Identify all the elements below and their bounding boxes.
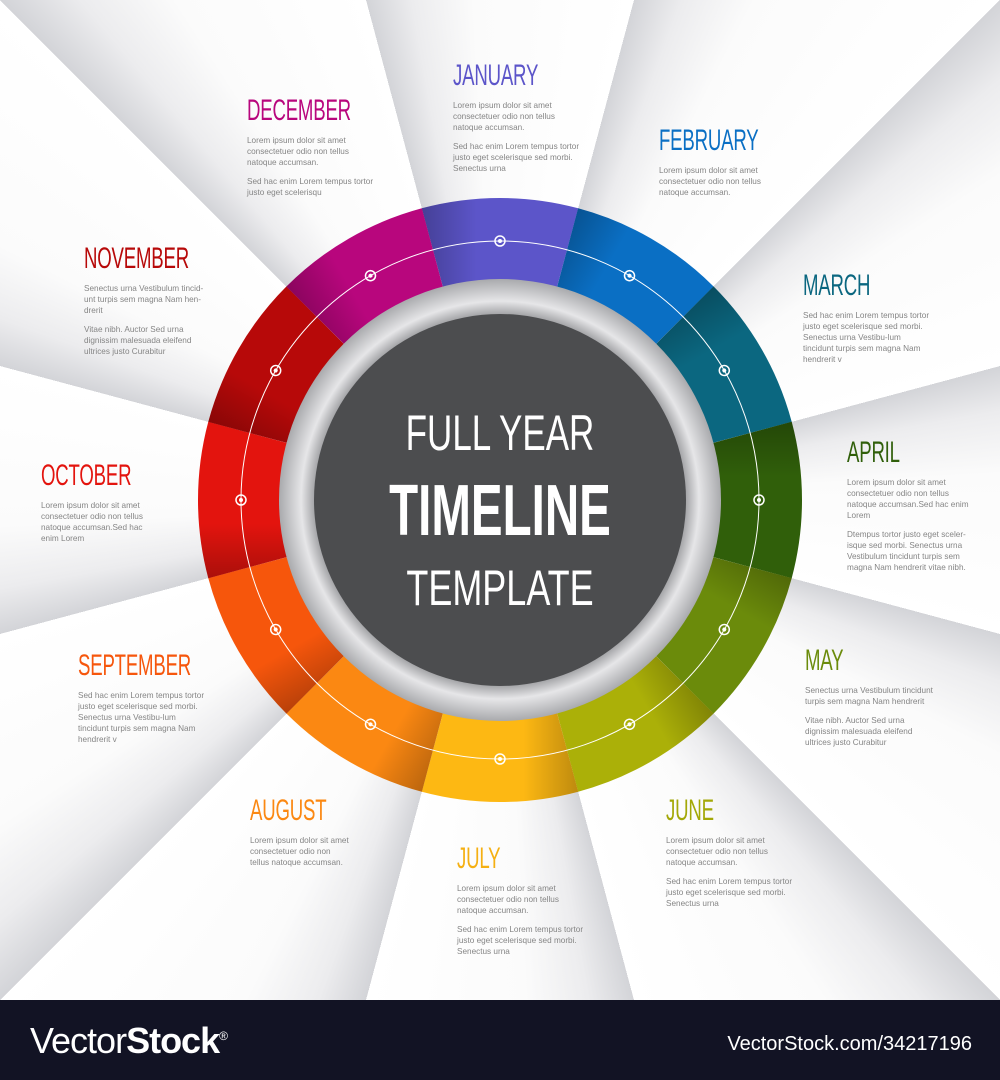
month: June: Sed hac enim Lorem tempus tortor justo eget scelerisque sed morbi. Senectus urna (666, 877, 792, 908)
month: September: Sed hac enim Lorem tempus tortor justo eget scelerisque sed morbi. Senectus urna Vestibu-lum tincidunt turpis sem magna Nam hendrerit v (78, 691, 204, 744)
month: March: MARCH (803, 269, 870, 302)
month: November: Vitae nibh. Auctor Sed urna dignissim malesuada eleifend ultrices justo Curabitur (84, 325, 191, 356)
month: April: Lorem ipsum dolor sit amet consectetuer odio non tellus natoque accumsan.Sed hac enim Lorem (847, 478, 969, 520)
month: July: JULY (457, 842, 500, 875)
month: December: DECEMBER (247, 94, 351, 127)
month: August: Lorem ipsum dolor sit amet consectetuer odio non tellus natoque accumsan. (250, 836, 349, 867)
center dark disc (314, 314, 686, 686)
month: November: NOVEMBER (84, 242, 189, 275)
month: June: JUNE (666, 794, 714, 827)
month: October: OCTOBER (41, 459, 131, 492)
footer url: VectorStock.com/34217196 (727, 1033, 972, 1055)
ring segments (198, 198, 802, 802)
month: May: MAY (805, 644, 843, 677)
month: April (847, 436, 969, 572)
month: February: Lorem ipsum dolor sit amet consectetuer odio non tellus natoque accumsan. (659, 166, 761, 197)
month: July (456, 842, 583, 956)
month: July: Sed hac enim Lorem tempus tortor justo eget scelerisque sed morbi. Senectus urna (457, 925, 583, 956)
month: March: Sed hac enim Lorem tempus tortor justo eget scelerisque sed morbi. Senectus urna Vestibu-lum tincidunt turpis sem magna Nam hendrerit v (803, 311, 929, 364)
center title: TEMPLATE (406, 561, 594, 616)
month: August (250, 794, 349, 867)
month: June: Lorem ipsum dolor sit amet consectetuer odio non tellus natoque accumsan. (666, 836, 768, 867)
month: February: FEBRUARY (659, 124, 758, 157)
center bevel ring (279, 279, 721, 721)
month: January: Sed hac enim Lorem tempus tortor justo eget scelerisque sed morbi. Senectus urna (453, 142, 579, 173)
center title (389, 406, 611, 616)
month: July: Lorem ipsum dolor sit amet consectetuer odio non tellus natoque accumsan. (457, 884, 559, 915)
month: December: Lorem ipsum dolor sit amet consectetuer odio non tellus natoque accumsan. (247, 136, 349, 167)
footer logo: VectorStock® (30, 1020, 227, 1061)
month: November: Senectus urna Vestibulum tincid-unt turpis sem magna Nam hen-drerit (84, 284, 203, 315)
month: January: JANUARY (453, 59, 538, 92)
month: June (666, 794, 792, 908)
month: December (246, 94, 373, 197)
month: October: Lorem ipsum dolor sit amet consectetuer odio non tellus natoque accumsan.Sed hac enim Lorem (41, 501, 143, 543)
month: January (452, 59, 579, 173)
month: March (802, 269, 929, 364)
center title: TIMELINE (389, 470, 611, 550)
month: April: Dtempus tortor justo eget sceler-isque sed morbi. Senectus urna Vestibulum tincidunt turpis sem magna Nam hendrerit vitae nibh. (847, 530, 966, 572)
month: December: Sed hac enim Lorem tempus tortor justo eget scelerisqu (247, 177, 373, 197)
month: April: APRIL (847, 436, 900, 469)
month: November (84, 242, 203, 356)
month: May: Senectus urna Vestibulum tincidunt turpis sem magna Nam hendrerit (805, 686, 933, 706)
month: January: Lorem ipsum dolor sit amet consectetuer odio non tellus natoque accumsan. (453, 101, 555, 132)
month: May (805, 644, 933, 747)
month: August: AUGUST (250, 794, 326, 827)
month: September (78, 649, 204, 744)
month: February (659, 124, 761, 197)
footer bar (0, 1000, 1000, 1080)
month: May: Vitae nibh. Auctor Sed urna dignissim malesuada eleifend ultrices justo Curabitur (805, 716, 912, 747)
timeline line with markers (236, 236, 764, 764)
month: October (41, 459, 143, 543)
center title: FULL YEAR (406, 406, 594, 462)
month: September: SEPTEMBER (78, 649, 191, 682)
